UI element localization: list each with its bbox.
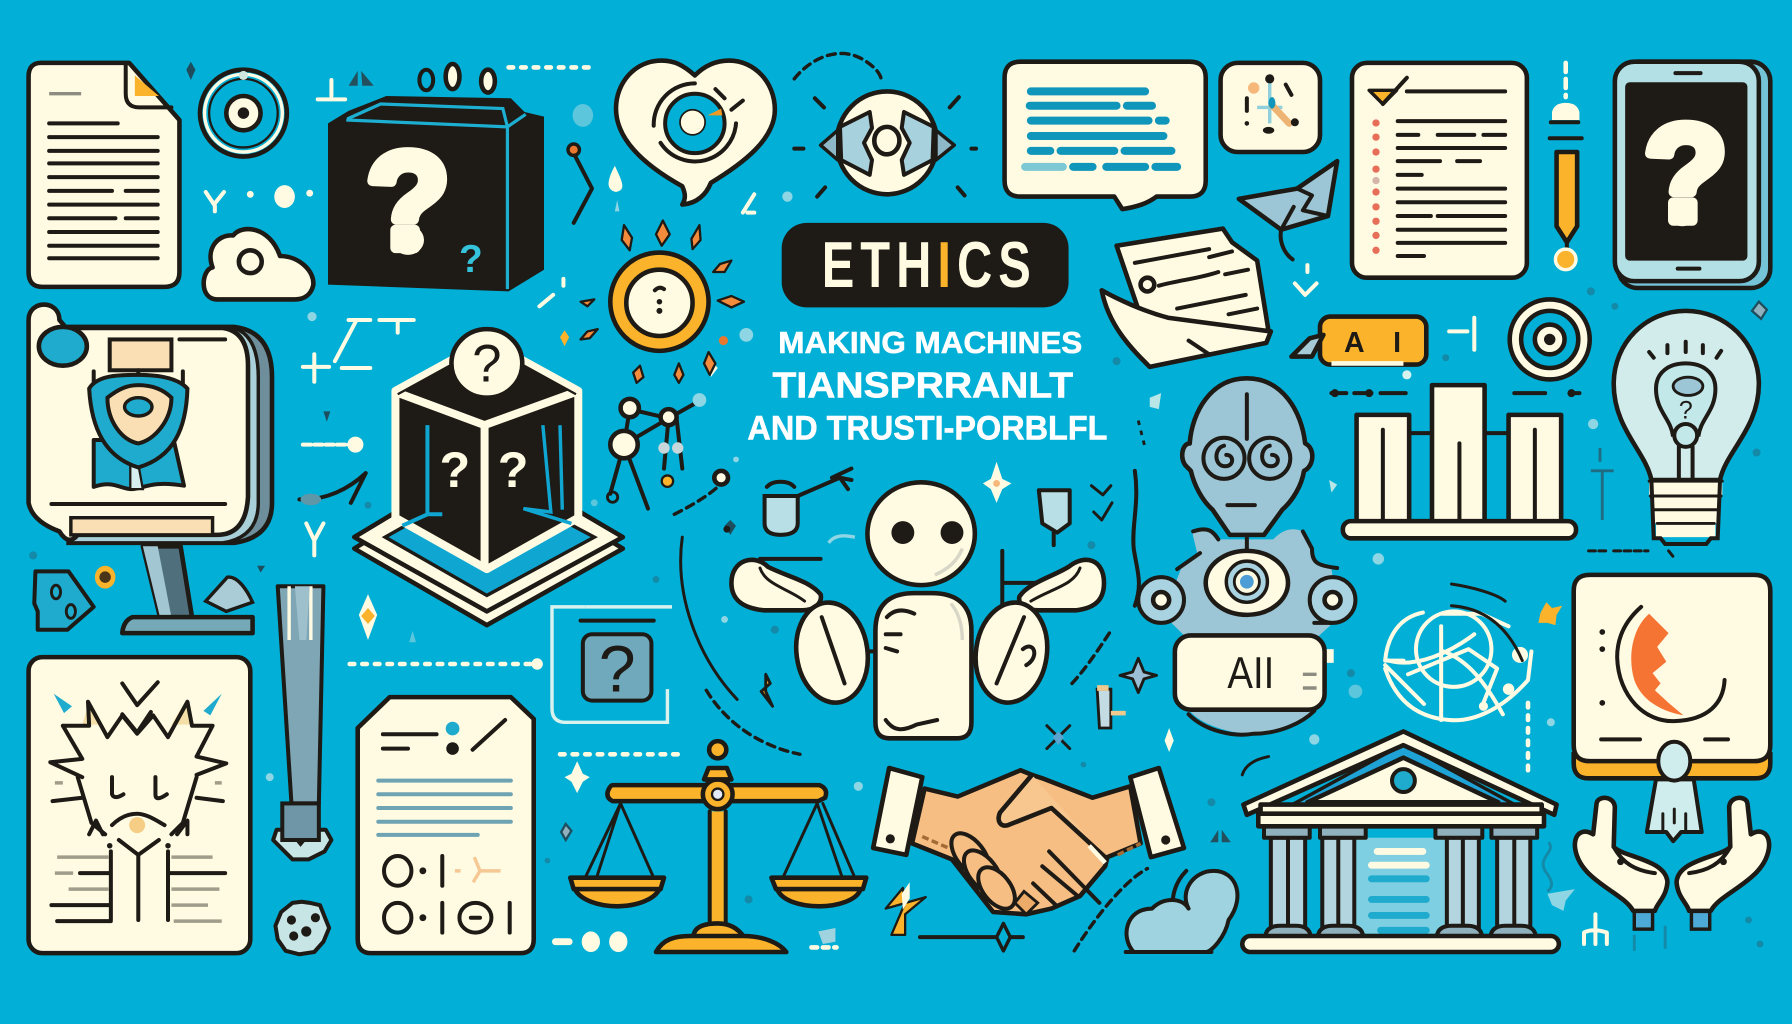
isometric black box on platform: ? [439,441,470,498]
yellow AI tag [1291,317,1426,365]
black mystery box with question mark: ? [366,125,450,278]
small marks bottom right [1543,448,1673,944]
balance scale [570,741,866,952]
marks around handshake [886,869,1186,951]
lion face panel [29,657,250,953]
monitor stand [122,546,253,633]
bottom document with binary [358,697,534,953]
yellow AI tag: A [1344,327,1365,359]
paper airplane [1239,161,1337,295]
scattered dots and specks [29,191,1767,951]
right hand [1677,798,1769,929]
robot cups and tools [760,469,1097,615]
dashed curves and sparkles center [674,462,1157,754]
framed question icon: ? [599,632,636,706]
monitor with shield badge [29,305,272,633]
framed question icon [350,607,672,722]
molecule network [607,393,706,509]
right panel with orange crescent [1574,575,1770,778]
person figure [1647,742,1702,841]
classical temple [1242,703,1559,952]
bar chart [1331,385,1579,538]
left hand [1575,798,1667,929]
eye icon with rays [794,53,976,197]
cloud icon [204,229,313,299]
folded papers envelope [1102,229,1271,367]
person and caring hands [1575,742,1769,929]
checklist document [1352,63,1527,278]
light bulb with question mark [1614,311,1759,544]
tablet with question mark [1615,62,1770,288]
pencil icon [1550,63,1582,270]
small cloud bottom [1126,871,1237,952]
subtitle heading: AND TRUSTI-PORBLFL [747,409,1107,447]
blue robot with AI label [1138,378,1355,735]
tall column tool [273,586,331,859]
heart speech bubble with eye [609,61,775,205]
target right icon [1449,299,1590,379]
blue robot with AI label: AII [1227,649,1274,698]
subtitle heading [747,327,1107,447]
ethics title pill: ETHICS [822,229,1037,302]
left small marks [34,320,414,640]
black mystery box with question mark: ? [459,238,483,281]
isometric black box on platform [354,329,623,625]
clock square icon [1221,63,1320,152]
robot hands [731,560,1104,610]
subtitle heading: TIANSPRRANLT [773,365,1073,406]
document icon top-left [29,63,179,287]
small decorative marks top-left [206,64,597,223]
sun icon with orange petals [539,221,744,383]
ethics title pill [782,223,1069,307]
bottom small marks [555,754,837,952]
black mystery box with question mark [328,96,544,291]
subtitle heading: MAKING MACHINES [778,327,1082,360]
isometric black box on platform: ? [498,441,529,498]
central white robot [731,469,1104,738]
light bulb with question mark: ? [1679,396,1693,424]
isometric black box on platform: ? [472,335,501,394]
target circle icon [186,62,287,157]
tablet with question mark: ? [1644,98,1728,251]
yellow AI tag: I [1393,327,1401,359]
speech bubble with blue text lines [1005,62,1206,209]
globe network lines [1373,553,1562,720]
cookie gear icon [275,902,329,954]
handshake [873,768,1184,915]
